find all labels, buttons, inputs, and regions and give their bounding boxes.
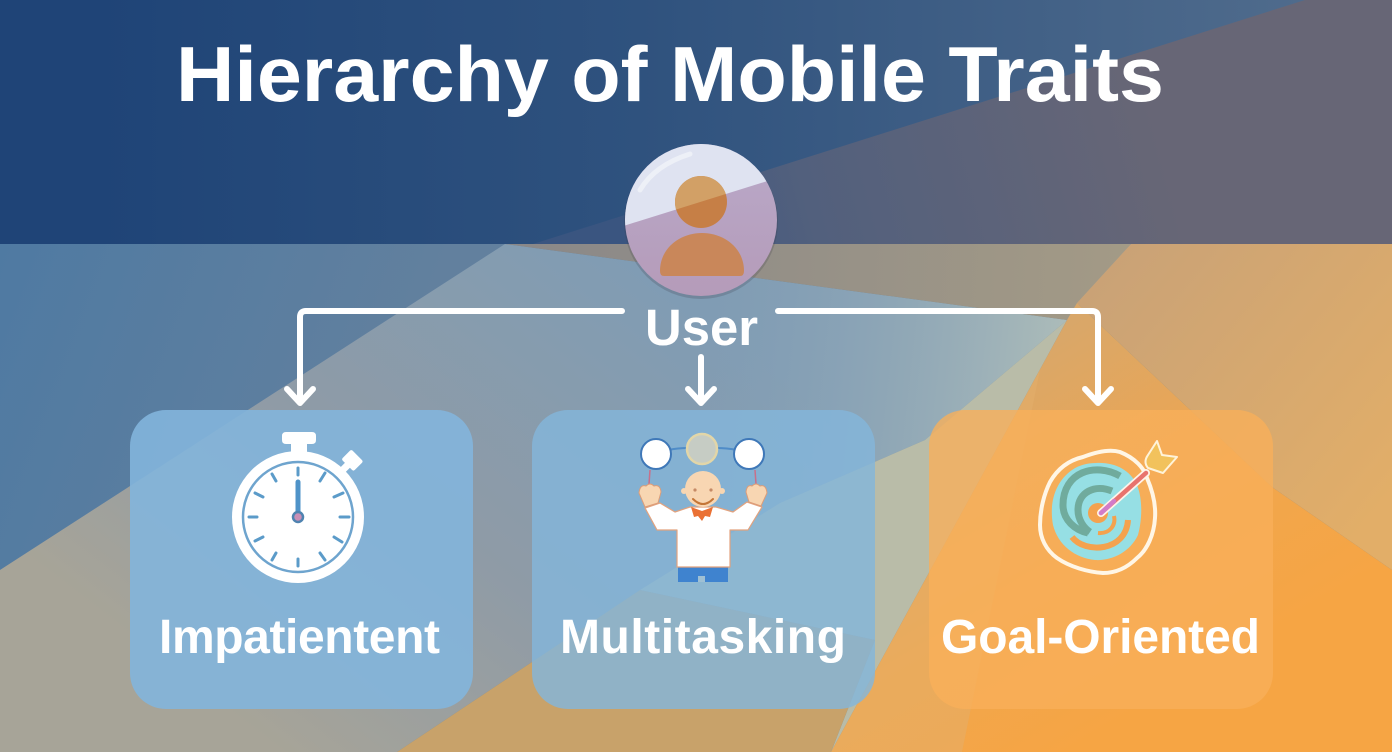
arrow: to Multitasking xyxy=(688,357,714,403)
person icon xyxy=(660,176,744,276)
icon: stopwatch xyxy=(232,432,364,583)
arrow: to Impatient xyxy=(287,311,622,403)
card: Goal-Oriented xyxy=(929,410,1273,709)
connector arrows xyxy=(287,311,1111,403)
card: Impatient xyxy=(130,410,473,709)
label: Multitasking: Multitasking xyxy=(560,611,846,664)
icon: target with arrow xyxy=(1040,441,1177,573)
arrow: to Goal-Oriented xyxy=(778,311,1111,403)
title: Hierarchy of Mobile Traits xyxy=(176,30,1164,118)
card: Multitasking xyxy=(532,410,875,709)
label: Impatientent: Impatientent xyxy=(159,611,440,664)
icon: juggling person xyxy=(639,434,767,582)
user avatar xyxy=(624,144,778,299)
label: Goal-Oriented: Goal-Oriented xyxy=(941,611,1260,664)
label: User: User xyxy=(645,299,758,356)
